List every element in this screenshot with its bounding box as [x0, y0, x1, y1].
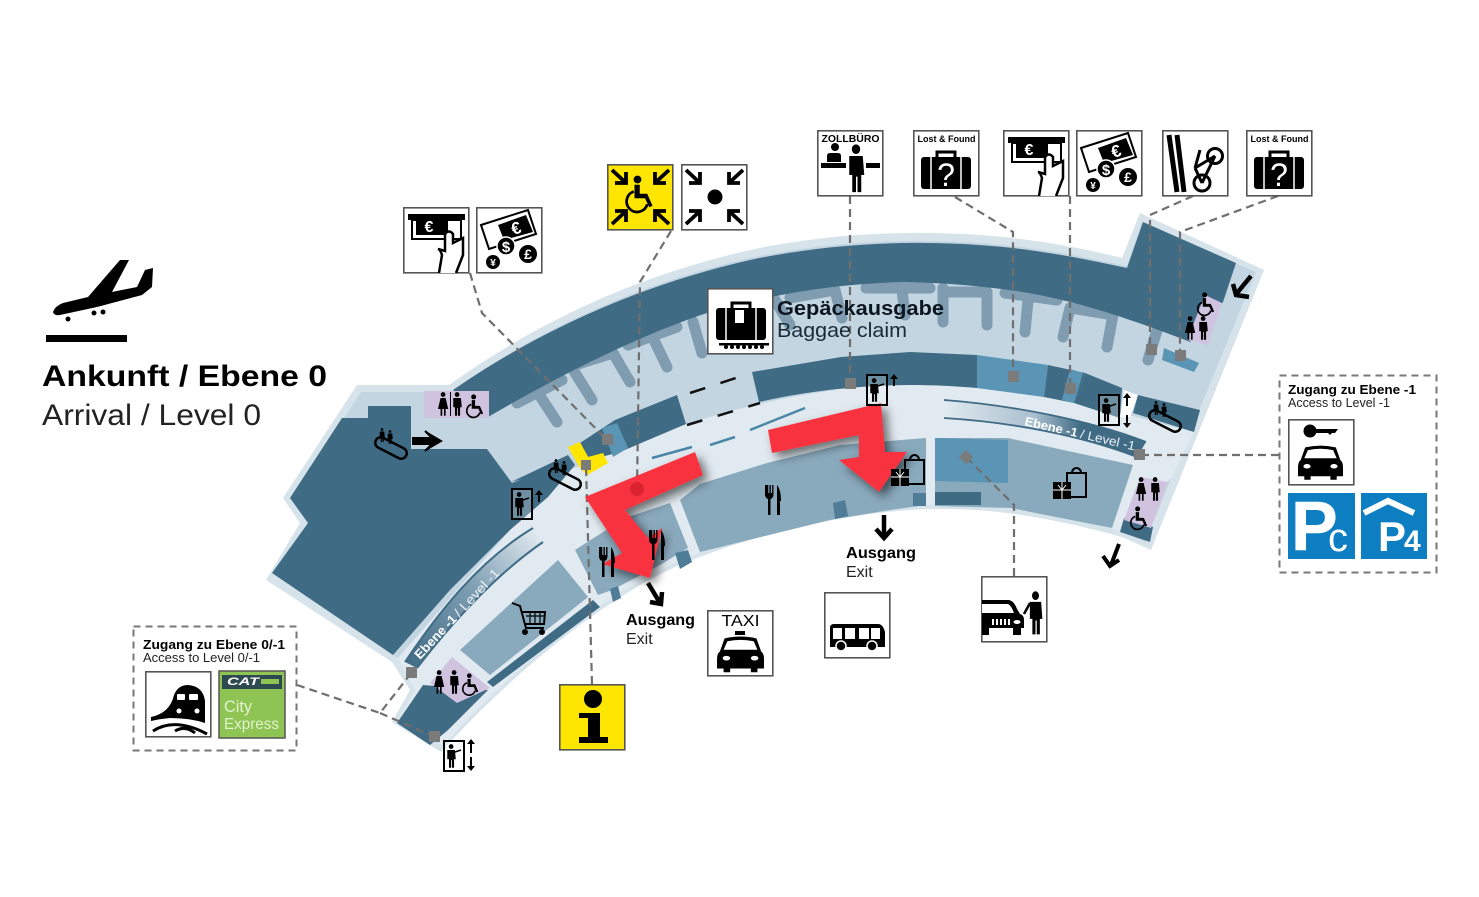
icon: lift south: [444, 739, 475, 771]
information: [560, 685, 625, 750]
yellow meeting point: [568, 442, 608, 475]
icon: trolley: [512, 603, 545, 634]
icon: lift west: [512, 489, 543, 519]
icon: arrow east: [413, 431, 441, 451]
icon: landing plane: [46, 260, 153, 342]
icons: toilets right: [1131, 477, 1160, 529]
transport: pick-up: [982, 577, 1047, 642]
floor: [275, 222, 1256, 746]
terminal floor plan: [266, 213, 1264, 752]
exit label east: Ausgang: [846, 545, 916, 562]
service: assembly wheelchair: [608, 165, 673, 230]
exit label east: [846, 545, 916, 581]
shop block: supermarket: [460, 560, 588, 675]
sign: City Express: City: [224, 697, 252, 716]
label: ramp east: [1023, 414, 1137, 453]
transport: taxi: [708, 611, 773, 676]
icon: train: [146, 672, 211, 737]
icon: exit arrows: [1233, 276, 1251, 297]
level -1 ramp east: [944, 400, 1146, 457]
service: lost and found 2: ?: [1270, 157, 1288, 193]
shops east: [935, 438, 1133, 528]
sign: Pc: c: [1328, 516, 1348, 560]
sign: Pc: P: [1291, 487, 1338, 565]
heading: Ankunft / Ebene 0: [42, 360, 327, 393]
sign: P4: P: [1378, 513, 1406, 560]
text: access heading: Zugang zu Ebene -1: [1288, 382, 1416, 397]
icon: baggage: [708, 289, 773, 354]
glass dividers: [687, 375, 760, 425]
text: access sub: Access to Level 0/-1: [143, 650, 260, 665]
exit label west: Exit: [626, 631, 653, 648]
icons: toilets lower left: [434, 670, 478, 695]
sign: P4: [1361, 493, 1427, 560]
red route arrows: [585, 403, 907, 578]
icon: lift centre: [867, 374, 898, 405]
dashed leader lines: [297, 196, 1279, 737]
service: assembly point: [682, 165, 747, 230]
icons: toilets top: [438, 392, 483, 417]
icon: escalator east: [1147, 401, 1183, 434]
service: currency west: [477, 208, 542, 273]
label: ramp west: Ebene -1: [411, 612, 460, 662]
service: customs: [818, 131, 883, 196]
service: lost and found 2: [1247, 131, 1312, 196]
lilac: toilets: [424, 295, 1222, 703]
service: oversize baggage: [1163, 131, 1228, 196]
left service block: [272, 406, 548, 655]
lower left service: [397, 685, 488, 745]
second band left: [511, 455, 575, 497]
transport: taxi: TAXI: [722, 613, 760, 630]
access panel: level 0/-1: [134, 626, 296, 750]
text: access sub: Access to Level -1: [1288, 395, 1390, 410]
terminal outline: [266, 213, 1264, 752]
arrow: route east exit: [768, 403, 907, 492]
service: ATM east: [1004, 131, 1069, 196]
service: lost and found 1: Lost & Found: [918, 134, 976, 145]
leader end markers: [406, 344, 1186, 742]
subheading: Arrival / Level 0: [42, 399, 261, 432]
arrow: route west exit: [585, 452, 703, 578]
service: lost and found 2: Lost & Found: [1250, 134, 1309, 145]
sign: Pc: [1288, 487, 1355, 565]
access panel: level -1: [1280, 376, 1436, 572]
text: access heading: Zugang zu Ebene 0/-1: [143, 637, 285, 652]
restaurant blocks: [575, 503, 688, 595]
icon: gifts: [891, 455, 924, 486]
label: ramp west: [411, 566, 503, 662]
marker on route: [630, 482, 644, 496]
baggage claim label: [708, 289, 944, 354]
sign: P4: 4: [1404, 525, 1421, 558]
service: ATM west: [404, 208, 469, 273]
service: lost and found 1: ?: [937, 157, 955, 193]
exit label west: [626, 612, 695, 648]
icon: cutlery: [765, 485, 781, 515]
text: Gepäckausgabe: Gepäckausgabe: [777, 298, 944, 320]
label: ramp east: Ebene -1: [1023, 414, 1079, 440]
arrivals corridor: [398, 385, 1194, 746]
second band centre: [752, 352, 977, 402]
title block: [42, 260, 327, 432]
service: currency east: [1077, 131, 1142, 196]
level -1 ramp west: [405, 528, 543, 668]
sign: City Express: CAT: [227, 676, 261, 688]
icons: toilets top right: [1185, 292, 1214, 340]
plan pictograms: [373, 276, 1251, 771]
text: Baggae claim: Baggae claim: [777, 319, 907, 342]
service: customs: ZOLLBÜRO: [822, 132, 880, 145]
icon: escalator west: [373, 428, 409, 461]
icon: escalator centre: [547, 459, 583, 492]
lower right service: [1120, 518, 1153, 542]
service: lost and found 1: [914, 131, 979, 196]
transport: bus: [825, 593, 890, 658]
baggage belts: [517, 288, 1158, 422]
label: ramp west: / Level -1: [451, 566, 503, 620]
label: ramp east: / Level -1: [1079, 427, 1137, 453]
sign: City Express: [219, 671, 285, 738]
icon: lift east: [1099, 393, 1131, 428]
sign: City Express: Express: [224, 716, 279, 733]
icon: car key: [1289, 420, 1354, 485]
exit label west: Ausgang: [626, 612, 695, 629]
dark upper band: [453, 222, 1236, 417]
exit label east: Exit: [846, 564, 873, 581]
